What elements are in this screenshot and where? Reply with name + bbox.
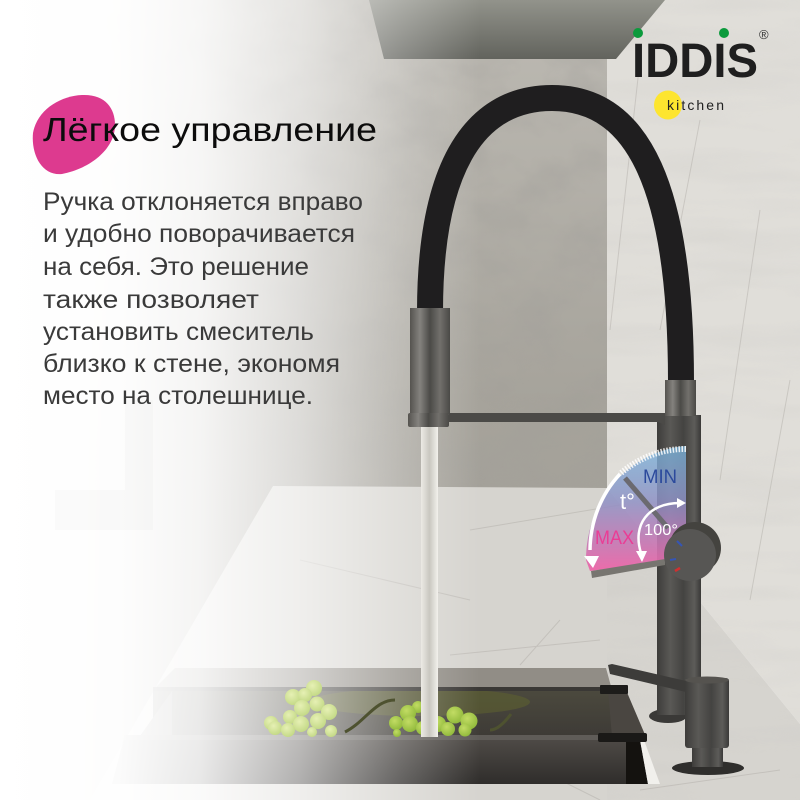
100 degree label: 100°: [644, 522, 678, 539]
faucet and dispenser lower parts: [608, 415, 744, 775]
lever at max position: [591, 559, 665, 578]
sink right side wall: [608, 690, 646, 737]
IDDIS logo: [632, 27, 769, 120]
hose collar right: [665, 380, 696, 416]
MIN label: MIN: [643, 467, 677, 488]
range hood: [369, 0, 665, 59]
title: Лёгкое управление: [43, 111, 377, 148]
body paragraph: также позволяет: [43, 286, 260, 314]
cold marks: [670, 541, 682, 560]
window frame shadow: [55, 400, 153, 530]
dispenser base: [672, 761, 744, 775]
sink front wall: [112, 738, 626, 784]
body paragraph: место на столешнице.: [43, 382, 313, 410]
sink back ledge: [153, 668, 612, 690]
body paragraph: установить смеситель: [43, 318, 314, 346]
yellow blob: [654, 90, 682, 120]
knob back: [669, 522, 721, 574]
body paragraph: на себя. Это решение: [43, 253, 309, 281]
concrete texture: [0, 0, 607, 490]
left grape bunch: [264, 680, 337, 737]
faucet base: [649, 709, 687, 723]
outer hatched arc: [620, 449, 686, 474]
hose collar left: [410, 308, 450, 414]
outer arc arrow: [590, 474, 620, 550]
sink upper rim: [153, 687, 626, 691]
right grape bunch: [389, 701, 478, 737]
rim clip front right: [598, 733, 647, 742]
dispenser neck: [692, 745, 723, 767]
background: concrete wall: [0, 0, 607, 800]
t degree label: t°: [620, 489, 635, 514]
body paragraph: [43, 188, 363, 410]
sink black corner: [626, 740, 648, 784]
knob face: [664, 529, 716, 581]
dispenser spout: [608, 664, 686, 692]
sink front rim: [124, 735, 602, 740]
horizontal arm: [449, 413, 665, 425]
grapes: [264, 680, 511, 737]
marble texture: [607, 0, 800, 800]
spout head: [408, 413, 449, 427]
rotation fan: [586, 446, 686, 571]
temperature control diagram: [584, 446, 686, 578]
faucet body: [657, 415, 701, 715]
background: marble countertop: [90, 486, 800, 800]
sink basin: [153, 688, 626, 738]
sink left side wall: [140, 691, 172, 736]
body paragraph: и удобно поворачивается: [43, 220, 355, 248]
logo green dots: [633, 28, 643, 38]
body paragraph: близко к стене, экономя: [43, 350, 340, 378]
registered mark: ®: [759, 27, 769, 42]
pink accent blob: [33, 95, 115, 174]
temperature knob: [664, 522, 721, 581]
hot mark: [675, 568, 680, 571]
flexible black hose: [430, 98, 681, 382]
background: marble side wall: [607, 0, 800, 724]
body paragraph: Ручка отклоняется вправо: [43, 188, 363, 216]
MAX label: MAX: [595, 528, 634, 549]
rim clip back right: [600, 685, 628, 694]
inner arc arrow: [639, 503, 680, 553]
water stream: [421, 427, 438, 737]
sink: [112, 668, 660, 784]
sink green reflection: [310, 688, 530, 716]
ghost lever: [625, 478, 668, 528]
grape stems: [345, 700, 511, 732]
dispenser body: [685, 678, 729, 748]
kitchen label: kitchen: [667, 97, 724, 113]
logo wordmark: IDDIS: [632, 35, 758, 88]
